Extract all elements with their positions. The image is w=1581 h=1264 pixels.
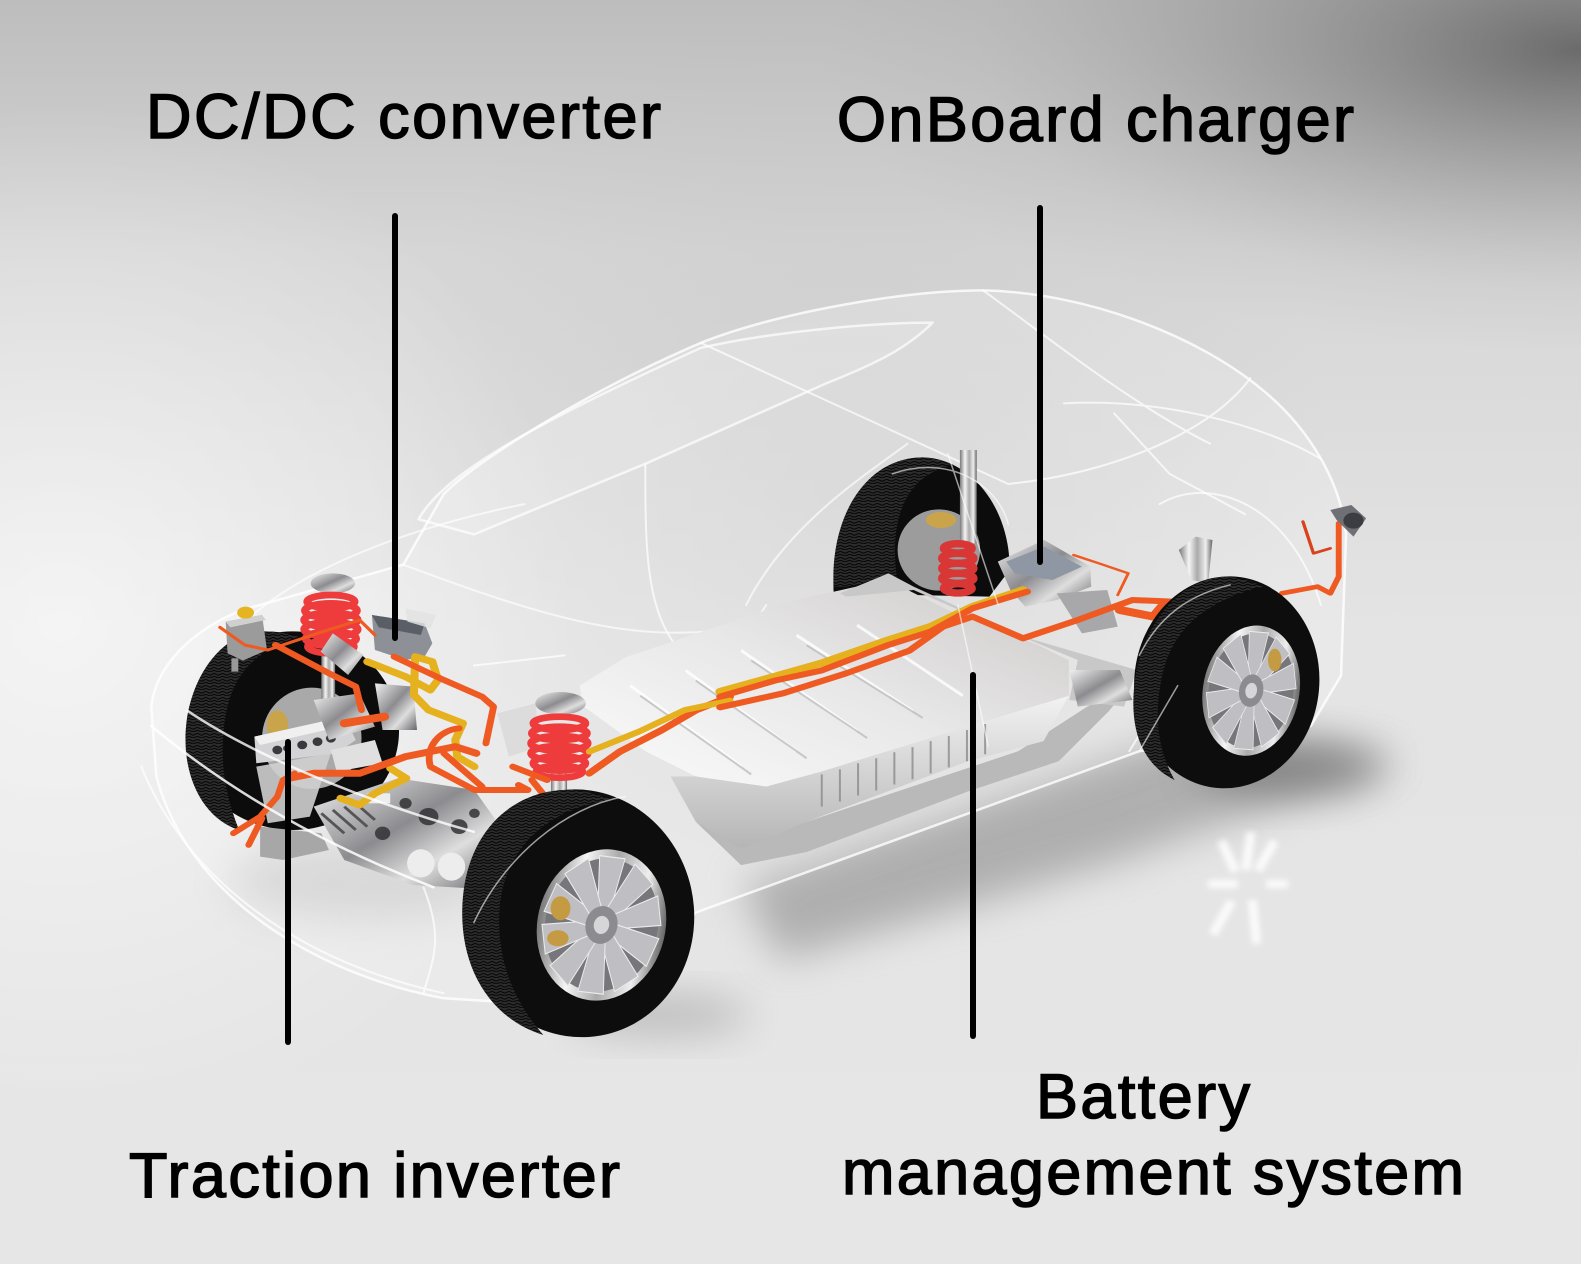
orange high-voltage cables — [220, 620, 730, 845]
floor shadows and reflections — [230, 730, 1400, 1035]
battery tray and lower rail — [696, 686, 1129, 865]
battery top surface — [580, 580, 1069, 786]
yellow coolant pipes — [340, 657, 474, 805]
reservoir with yellow cap — [226, 607, 267, 672]
car body: transparent shell outline — [141, 290, 1346, 1008]
callout leader: Traction inverter — [285, 742, 291, 1042]
rear electronics bracket — [1057, 537, 1212, 633]
icon: traction inverter unit — [254, 717, 383, 772]
battery ribs — [630, 625, 985, 807]
front strut assembly — [304, 573, 417, 740]
battery side face — [671, 696, 1069, 849]
callout leader: Battery management system — [970, 675, 976, 1036]
rear cross member — [840, 573, 1137, 707]
label: Traction inverter: Traction inverter — [129, 1141, 620, 1211]
rear chassis components — [720, 450, 1366, 707]
rear shock and spring — [943, 450, 977, 593]
rear near wheel — [1130, 574, 1324, 791]
wheel rim — [1194, 622, 1308, 760]
rear connector — [1330, 505, 1366, 537]
front near wheel — [453, 783, 704, 1044]
glass shell lines crossing the wheels — [151, 454, 1230, 923]
label: DC/DC converter: DC/DC converter — [146, 82, 661, 152]
near front strut and spring — [497, 692, 588, 797]
icon: DC/DC converter unit — [372, 608, 436, 660]
far front wheel — [185, 631, 399, 830]
callout leader: DC/DC converter — [392, 216, 398, 638]
battery pack — [580, 580, 1129, 865]
label: Battery management system — [842, 1062, 1464, 1208]
icon: onboard charger unit — [998, 540, 1091, 607]
far rear wheel — [833, 457, 1010, 597]
callout leader: OnBoard charger — [1037, 208, 1043, 562]
front drivetrain components — [220, 573, 730, 888]
label: Battery management system: Battery — [1036, 1062, 1250, 1132]
label: OnBoard charger: OnBoard charger — [837, 85, 1354, 155]
wheel rim — [526, 842, 677, 1008]
rear orange cables — [720, 522, 1339, 707]
electric motor and gearbox — [256, 753, 500, 888]
label: Battery management system: management system — [842, 1138, 1464, 1208]
